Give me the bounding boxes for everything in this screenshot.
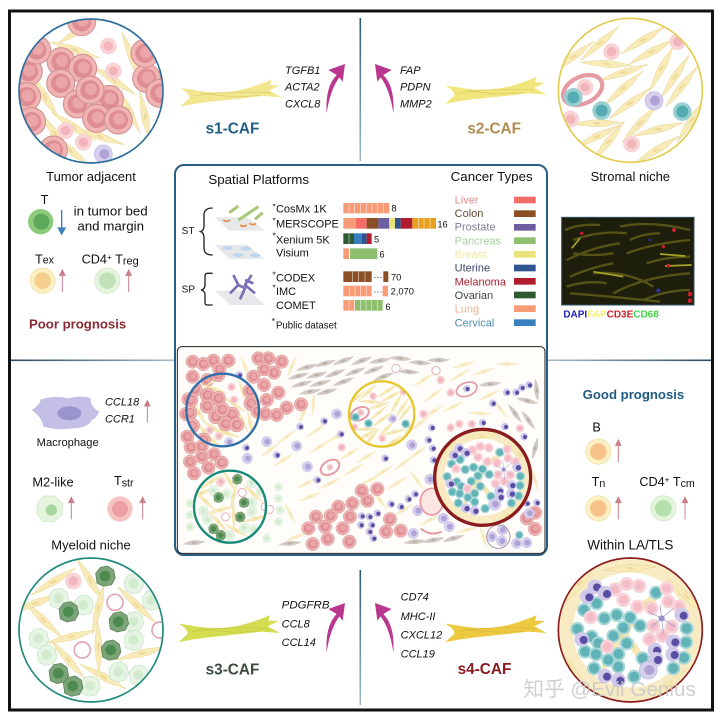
T cell decrease: and margin [77, 219, 144, 234]
platform labels: MERSCOPE [276, 218, 339, 230]
legend: cancer types: Prostate [455, 222, 496, 234]
LA/TLS circle [554, 558, 706, 705]
B cell: B [592, 421, 601, 435]
s2-CAF label: s2-CAF [467, 120, 521, 137]
CD4 Tcm cell: CD4 [639, 475, 665, 489]
platform labels: * [272, 283, 276, 293]
niche circle: stromal [344, 381, 419, 448]
SP bracket [182, 273, 213, 305]
s3-CAF label: s3-CAF [206, 661, 259, 678]
tumor adjacent circle [13, 8, 174, 171]
watermark: 知乎 @Evil Genius [523, 678, 696, 701]
icon: s3 fibroblast [178, 615, 280, 642]
Tn cell [586, 475, 621, 521]
Tex cell [30, 252, 65, 293]
public dataset note: * [272, 316, 276, 326]
s4 genes [401, 592, 442, 660]
macrophage label: Macrophage [37, 437, 99, 449]
icon: s2 fibroblast [445, 77, 547, 104]
panel: s4-CAF within LA/TLS [375, 387, 706, 705]
icon: macrophage [32, 397, 99, 429]
platform labels: * [272, 201, 276, 211]
platform labels: * [272, 269, 276, 279]
CD4 Treg cell: reg [123, 256, 139, 268]
panel: spatial platforms and map [175, 165, 547, 555]
CD4 Treg cell: T [112, 252, 123, 266]
bar chart: platforms: 70 [391, 272, 401, 282]
s1-CAF label: s1-CAF [206, 120, 259, 137]
SP bracket: SP [182, 284, 195, 295]
platform labels: COMET [276, 300, 316, 312]
platform labels: Visium [276, 248, 309, 260]
s4 genes: MHC-II [401, 611, 435, 623]
s2 genes: MMP2 [400, 99, 432, 111]
good prognosis label: Good prognosis [583, 387, 684, 402]
icon: Visium slide [215, 245, 265, 259]
cancer types heading: Cancer Types [451, 169, 533, 184]
icon: CosMx slide [215, 206, 265, 231]
panel: s1-CAF tumor adjacent [13, 8, 345, 331]
s3 genes [282, 600, 330, 649]
niche circle: LA/TLS [431, 429, 534, 527]
central panel border [175, 165, 547, 555]
legend: cancer types: Liver [455, 194, 479, 206]
platform labels: Xenium 5K [276, 234, 330, 246]
s1 genes: TGFB1 [285, 65, 320, 77]
public dataset note [272, 316, 337, 331]
arrow: s4 upregulation [375, 603, 394, 652]
s1 genes: ACTA2 [284, 82, 320, 94]
platform labels: * [272, 231, 276, 241]
poor prognosis label: Poor prognosis [29, 316, 126, 331]
T cell decrease: T [41, 193, 49, 207]
legend: cancer types: Breast [455, 249, 486, 261]
panel: s3-CAF myeloid niche [9, 397, 345, 702]
icon: s4 fibroblast [445, 615, 547, 642]
niche circle: tumor adjacent [183, 367, 265, 451]
bar chart: platforms: 6 [379, 250, 385, 260]
tissue map [177, 347, 545, 553]
platform labels: * [272, 215, 276, 225]
s1 genes [284, 65, 321, 111]
legend: cancer types: Ovarian [455, 290, 493, 302]
CD4 Tcm cell: T [670, 475, 681, 489]
ST bracket: ST [182, 226, 194, 237]
legend: cancer types: Uterine [455, 263, 490, 275]
bar chart: platforms [343, 203, 448, 312]
s1 genes: CXCL8 [285, 99, 321, 111]
arrow: s3 upregulation [326, 603, 345, 652]
CD4 Treg cell: CD4 [82, 252, 107, 266]
M2-like cell: M2-like [32, 475, 74, 490]
bar chart: platforms: 6 [385, 302, 391, 312]
CD4 Tcm cell: cm [681, 478, 695, 490]
s3 genes: CCL14 [282, 637, 316, 649]
s3 genes: CCL8 [282, 618, 311, 630]
macrophage genes [105, 397, 150, 426]
legend: cancer types: Melanoma [455, 276, 507, 288]
CD4 Tcm cell [639, 475, 695, 521]
arrow: s2 upregulation [375, 64, 394, 113]
gray stromal cells [182, 354, 542, 546]
Tstr cell [107, 474, 145, 522]
stromal niche circle [549, 18, 711, 164]
fluorescence image [562, 217, 694, 305]
T cell decrease [28, 193, 148, 234]
heading: tumor adjacent: Tumor adjacent [46, 169, 136, 184]
bar chart: platforms: 16 [437, 220, 448, 230]
legend: cancer types: Colon [455, 208, 483, 220]
platform labels: CosMx 1K [276, 204, 327, 216]
platforms block [182, 169, 536, 331]
Tn cell: n [599, 478, 605, 490]
platform labels [272, 201, 339, 312]
T cell decrease: in tumor bed [74, 204, 148, 219]
icon: s1 fibroblast [180, 79, 282, 107]
niche circle: myeloid [188, 468, 269, 543]
Tex cell: Tex [35, 252, 55, 266]
icon: antibody slide [215, 275, 265, 305]
bar chart: platforms: ··· [373, 286, 383, 296]
heading: stromal niche: Stromal niche [591, 169, 670, 184]
s2 genes: PDPN [400, 82, 431, 94]
panel: s2-CAF stromal niche [375, 18, 711, 321]
map border [177, 347, 545, 553]
Tn cell: T [592, 475, 599, 489]
macrophage genes: CCL18 [105, 397, 140, 409]
platform labels: CODEX [276, 273, 316, 285]
s4 genes: CXCL12 [401, 630, 442, 642]
legend: cancer types: Pancreas [455, 235, 502, 247]
s4 genes: CCL19 [401, 648, 435, 660]
platform labels: IMC [276, 286, 296, 298]
bar chart: platforms: 2,070 [391, 287, 414, 297]
Tstr cell: str [122, 477, 134, 489]
legend: cancer types: Cervical [455, 317, 494, 329]
small immune cells [186, 364, 540, 549]
heading: within LA/TLS: Within LA/TLS [587, 537, 673, 552]
s2 genes: FAP [400, 65, 421, 77]
platforms heading: Spatial Platforms [208, 172, 309, 187]
myeloid niche circle [9, 555, 168, 702]
B cell [586, 421, 621, 464]
arrow: s1 upregulation [326, 64, 345, 113]
public dataset note: Public dataset [276, 320, 337, 331]
bar chart: platforms: 5 [374, 234, 379, 244]
bar chart: platforms: ··· [373, 272, 383, 282]
CD4 Treg cell [82, 252, 139, 293]
stromal fibroblasts [240, 355, 539, 548]
s4 genes: CD74 [401, 592, 429, 604]
heading: myeloid niche: Myeloid niche [51, 537, 131, 552]
s3 genes: PDGFRB [282, 600, 330, 612]
CD4 Tcm cell: + [665, 475, 670, 485]
ST bracket [182, 208, 213, 255]
s2 genes [400, 65, 432, 111]
s4-CAF label: s4-CAF [458, 661, 511, 678]
CD4 Treg cell: + [107, 252, 112, 262]
legend: cancer types [455, 194, 536, 329]
legend: cancer types: Lung [455, 304, 479, 316]
Tstr cell: T [114, 474, 122, 488]
channel legend: DAPIFAPCD3ECD68 [563, 310, 659, 321]
tumor cell clusters [179, 352, 542, 551]
macrophage genes: CCR1 [105, 414, 135, 426]
M2-like cell [32, 475, 74, 522]
bar chart: platforms: 8 [391, 204, 397, 214]
